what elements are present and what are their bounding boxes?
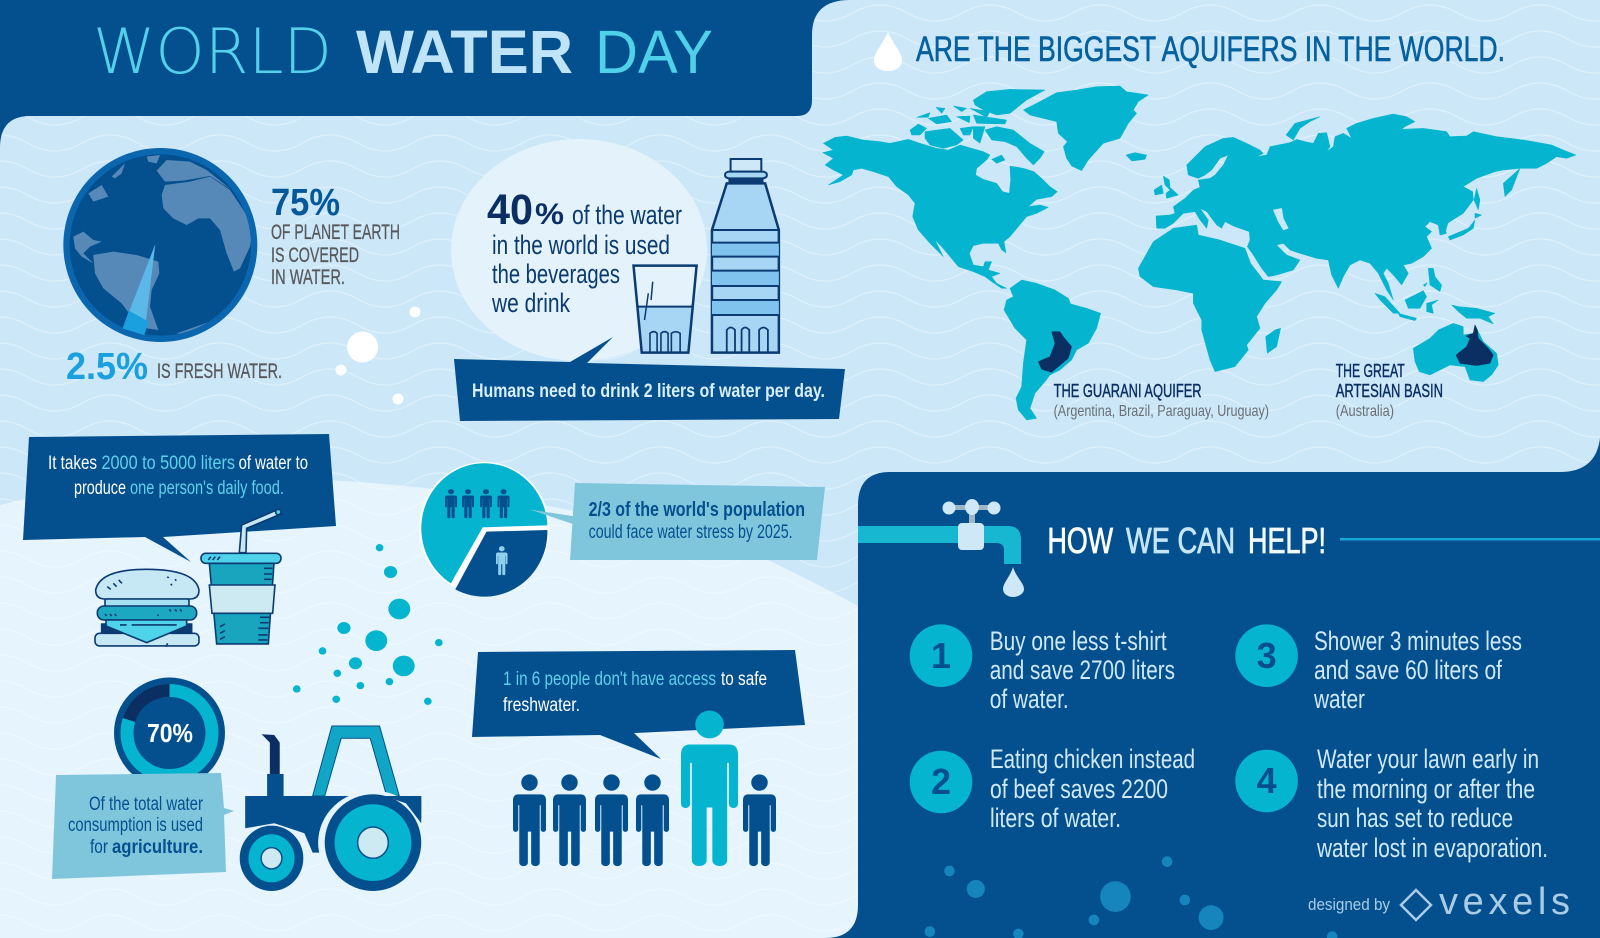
callout: agriculture: agriculture. <box>112 837 203 858</box>
tip 2: Eating chicken instead <box>990 744 1195 774</box>
label: great artesian basin: THE GREAT <box>1336 361 1405 381</box>
icon: burger <box>95 569 199 647</box>
heading <box>1048 520 1326 561</box>
text: 75 percent: OF PLANET EARTH <box>271 221 400 244</box>
speech bubble: 40 percent: the beverages <box>492 259 620 289</box>
tip 1: and save 2700 liters <box>990 655 1175 685</box>
speech bubble: 40 percent: in the world is used <box>492 230 670 260</box>
callout: agriculture: for <box>90 837 109 858</box>
credit: vexels <box>1308 881 1570 923</box>
label: guarani aquifer: (Argentina, Brazil, Paraguay, Uruguay) <box>1054 403 1269 420</box>
banner: humans need water: Humans need to drink 2 liters of water per day. <box>472 381 825 402</box>
text: 75 percent: IN WATER. <box>271 266 345 289</box>
callout: safe freshwater: to safe <box>721 669 767 690</box>
title: WORLD <box>93 15 332 88</box>
text: 2.5 percent: IS FRESH WATER. <box>157 360 282 383</box>
callout: safe freshwater: freshwater. <box>503 695 580 716</box>
text: 75 percent <box>271 182 400 289</box>
icon: cup <box>201 509 281 644</box>
label: great artesian basin <box>1336 361 1443 420</box>
icon: tractor <box>240 726 428 895</box>
tip 3 <box>1235 624 1522 714</box>
tip 2 <box>910 744 1195 833</box>
callout: agriculture <box>52 773 234 879</box>
tip 4: Water your lawn early in <box>1317 744 1539 774</box>
text: 2.5 percent <box>66 346 282 388</box>
credit: vexels: designed by <box>1308 895 1390 914</box>
tip 1: 1 <box>931 635 951 676</box>
callout: daily food: produce <box>74 478 126 499</box>
callout: daily food: 2000 to 5000 liters <box>102 453 235 474</box>
label: guarani aquifer <box>1054 381 1269 420</box>
tip 3: water <box>1313 684 1365 714</box>
icon: bottle <box>712 159 779 353</box>
banner: humans need water <box>454 337 845 421</box>
tip 3: Shower 3 minutes less <box>1314 626 1522 656</box>
text: 2.5 percent: 2.5% <box>66 346 148 388</box>
callout: agriculture: Of the total water <box>89 794 204 815</box>
tip 2: of beef saves 2200 <box>990 774 1168 804</box>
chart: 70 percent donut <box>114 678 225 788</box>
heading: HELP! <box>1248 520 1326 561</box>
pie people icons <box>445 489 510 575</box>
decorative bubbles <box>336 306 420 404</box>
tip 4: 4 <box>1257 760 1277 801</box>
panel: how we can help <box>825 438 1600 938</box>
tip 2: 2 <box>931 761 951 802</box>
water droplets scatter <box>293 544 443 705</box>
callout: daily food: It takes <box>48 453 97 474</box>
callout: daily food: of water to <box>239 453 308 474</box>
callout: daily food: one person's daily food. <box>130 478 284 499</box>
tip 1: Buy one less t-shirt <box>990 626 1167 656</box>
text: 75 percent: 75% <box>271 182 340 224</box>
tip 3: 3 <box>1257 635 1277 676</box>
callout: safe freshwater: 1 in 6 people don't have access <box>503 669 716 690</box>
heading: WE CAN <box>1126 520 1235 561</box>
chart: 70 percent donut: 70% <box>147 718 193 748</box>
tip 1 <box>910 624 1175 714</box>
callout: daily food <box>23 434 336 562</box>
tip 3: and save 60 liters of <box>1314 655 1502 685</box>
speech bubble: 40 percent: 40 <box>487 186 533 234</box>
tip 4: sun has set to reduce <box>1317 803 1513 833</box>
speech bubble: 40 percent: % <box>535 198 564 231</box>
speech bubble: 40 percent: of the water <box>572 200 682 230</box>
tip 2: liters of water. <box>990 803 1121 833</box>
callout: safe freshwater <box>472 650 805 759</box>
callout: population stress: could face water stress by 2025. <box>589 522 793 543</box>
tip 4: the morning or after the <box>1317 774 1535 804</box>
callout: population stress: 2/3 of the world's population <box>589 499 805 521</box>
people row icons <box>513 711 776 866</box>
credit: vexels: vexels <box>1439 881 1570 923</box>
callout: population stress <box>570 483 825 560</box>
icon: faucet <box>858 499 1024 597</box>
heading: HOW <box>1048 520 1113 561</box>
title <box>93 15 713 88</box>
tip 1: of water. <box>990 684 1069 714</box>
world map <box>823 86 1576 420</box>
icon: drop <box>874 32 902 71</box>
label: great artesian basin: (Australia) <box>1336 403 1394 420</box>
text: 75 percent: IS COVERED <box>271 244 359 267</box>
callout: agriculture: consumption is used <box>68 815 203 836</box>
eurasia africa australia <box>1138 114 1576 382</box>
americas and greenland <box>823 86 1148 420</box>
tip 4 <box>1235 744 1548 863</box>
label: great artesian basin: ARTESIAN BASIN <box>1336 381 1443 401</box>
icon: glass <box>634 266 697 353</box>
bottom dots <box>925 856 1337 938</box>
speech bubble: 40 percent <box>451 139 707 361</box>
label: guarani aquifer: THE GUARANI AQUIFER <box>1054 381 1202 401</box>
title: WATER <box>356 18 573 86</box>
icon: globe <box>63 148 257 342</box>
chart: population pie <box>419 462 576 597</box>
speech bubble: 40 percent: we drink <box>491 288 570 318</box>
title: DAY <box>595 18 713 86</box>
